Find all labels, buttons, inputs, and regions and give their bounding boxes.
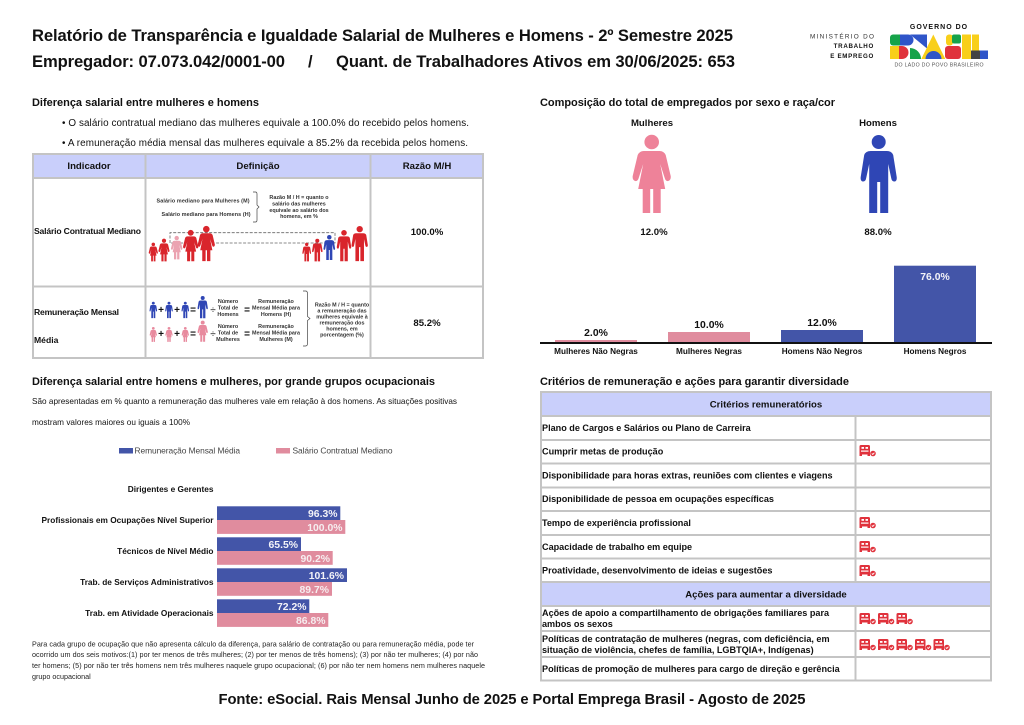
title: Quant. de Trabalhadores Ativos em 30/06/2025: 653 — [336, 52, 735, 71]
pictogram: mulheres: 12.0% — [640, 227, 668, 238]
logo: Ministério do Trabalho e Emprego — [810, 32, 874, 60]
diagram: salário mediano: Razão M / H = quanto o — [269, 195, 329, 201]
bar chart: sexo e raça/cor: Mulheres Negras — [676, 347, 742, 356]
bar chart: grupos ocupacionais: 65.5% — [269, 540, 298, 551]
table: critérios e ações: ambos os sexos — [542, 619, 613, 629]
table: critérios e ações: Políticas de promoção de mulheres para cargo de direção e gerência — [542, 664, 841, 674]
diagram: salário mediano: equivale ao salário dos — [269, 208, 329, 214]
bar chart: grupos ocupacionais: Técnicos de Nível Médio — [117, 546, 214, 556]
table: critérios e ações: Plano de Cargos e Salários ou Plano de Carreira — [542, 423, 752, 433]
text block: resumo: • O salário contratual mediano das mulheres equivale a 100.0% do recebido pelos homens. — [62, 118, 469, 129]
table: indicadores: Indicador — [67, 161, 111, 172]
title: Empregador: 07.073.042/0001-00 — [32, 52, 285, 71]
title: / — [308, 52, 313, 71]
legend: Salário Contratual Mediano — [292, 446, 393, 456]
logo: Governo do Brasil — [890, 24, 988, 68]
bar chart: grupos ocupacionais: Dirigentes e Gerentes — [128, 484, 214, 494]
diagram: remuneração média: Mulheres (M) — [259, 337, 293, 343]
bar chart: sexo e raça/cor: 10.0% — [694, 320, 724, 331]
diagram: remuneração média: + — [158, 329, 164, 340]
table: critérios e ações: Cumprir metas de produção — [542, 446, 664, 456]
pictogram: mulheres — [631, 118, 673, 238]
bar chart: sexo e raça/cor: Mulheres Não Negras — [554, 347, 638, 356]
logo: Governo do Brasil: GOVERNO DO — [910, 24, 968, 31]
table: critérios e ações: Disponibilidade para horas extras, reuniões com clientes e viagens — [542, 470, 833, 480]
diagram: remuneração média: + — [174, 305, 180, 316]
table: critérios e ações: Proatividade, desenvolvimento de ideias e sugestões — [542, 566, 772, 576]
text block: resumo — [62, 118, 469, 149]
footnote: grupo ocupacional — [32, 672, 91, 681]
footnote: Para cada grupo de ocupação que não apresenta cálculo da diferença, para salário de contratação ou para remuneração média, pode ter — [32, 640, 475, 648]
footnote: ocorrido um dos seis motivos:(1) por ter menos de três mulheres; (2) por ter menos de três homens); (3) por não ter mulheres; (4) por não — [32, 650, 478, 659]
diagram: salário mediano: Salário mediano para Mulheres (M) — [156, 198, 250, 204]
text block: explicação — [32, 397, 457, 427]
diagram: remuneração média: = — [244, 329, 250, 340]
bar chart: grupos ocupacionais: Trab. em Atividade Operacionais — [85, 608, 214, 618]
text block: explicação: São apresentadas em % quanto a remuneração das mulheres vale em relação à dos homens. As situações positivas — [32, 397, 457, 406]
bar chart: sexo e raça/cor: Homens Negros — [904, 347, 967, 356]
legend — [119, 446, 393, 456]
diagram: remuneração média: Total de — [218, 306, 238, 312]
diagram: remuneração média: Razão M / H = quanto — [315, 302, 370, 308]
bar chart: grupos ocupacionais: Profissionais em Ocupações Nível Superior — [42, 515, 214, 525]
text block: resumo: • A remuneração média mensal das mulheres equivale a 85.2% da recebida pelos homens. — [62, 138, 468, 149]
bar chart: grupos ocupacionais: 86.8% — [296, 616, 326, 627]
table: critérios e ações: situação de violência, chefes de família, LGBTQIA+, Indígenas) — [542, 645, 814, 655]
table: critérios e ações: Ações de apoio a compartilhamento de obrigações familiares para — [542, 608, 830, 618]
bar chart: sexo e raça/cor: 76.0% — [920, 272, 950, 283]
diagram: remuneração média: Número — [218, 299, 239, 305]
table: critérios e ações: Disponibilidade de pessoa em ocupações específicas — [542, 494, 774, 504]
heading: diferença salarial: Diferença salarial entre mulheres e homens — [32, 97, 259, 109]
diagram: salário mediano — [149, 192, 368, 261]
heading: grupos ocupacionais: Diferença salarial entre homens e mulheres, por grande grupos ocupacionais — [32, 376, 435, 388]
bar chart: sexo e raça/cor: Homens Não Negros — [782, 347, 863, 356]
diagram: remuneração média: a remuneração das — [317, 308, 367, 314]
icons: critérios presentes — [860, 445, 950, 650]
table: indicadores: Definição — [236, 161, 280, 172]
table: indicadores — [33, 154, 483, 358]
bar chart: grupos ocupacionais — [42, 484, 347, 627]
table: indicadores: Salário Contratual Mediano — [34, 226, 141, 236]
pictogram: homens: 88.0% — [864, 227, 892, 238]
title — [32, 26, 735, 71]
diagram: salário mediano: homens, em % — [280, 214, 318, 220]
diagram: remuneração média: = — [190, 329, 196, 340]
title: Relatório de Transparência e Igualdade Salarial de Mulheres e Homens - 2º Semestre 2025 — [32, 26, 733, 45]
diagram: remuneração média: ÷ — [210, 329, 216, 340]
logo: Ministério do Trabalho e Emprego: MINISTÉRIO DO — [810, 32, 874, 40]
bar chart: sexo e raça/cor: 2.0% — [584, 328, 608, 339]
table: critérios e ações: Tempo de experiência profissional — [542, 518, 691, 528]
bar chart: grupos ocupacionais: Trab. de Serviços Administrativos — [80, 577, 214, 587]
bar chart: grupos ocupacionais: 96.3% — [308, 509, 338, 520]
table: critérios e ações: Políticas de contratação de mulheres (negras, com deficiência, em — [542, 634, 830, 644]
logo: Ministério do Trabalho e Emprego: TRABALHO — [834, 43, 874, 50]
pictogram: homens — [859, 118, 897, 238]
source: Fonte: eSocial. Rais Mensal Junho de 2025 e Portal Emprega Brasil - Agosto de 2025 — [218, 692, 806, 708]
diagram: salário mediano: Salário mediano para Homens (H) — [162, 212, 251, 218]
footnote: ter homens; (5) por não ter três homens nem três mulheres naquele grupo ocupacional; (6) por não ter nem homens nem mulheres naquele — [32, 661, 485, 670]
diagram: remuneração média: + — [174, 329, 180, 340]
logo: Governo do Brasil: DO LADO DO POVO BRASILEIRO — [894, 62, 984, 68]
diagram: remuneração média — [150, 291, 370, 346]
bar chart: sexo e raça/cor — [540, 266, 992, 356]
table: indicadores: 100.0% — [411, 227, 444, 238]
diagram: remuneração média: Homens (H) — [261, 312, 291, 318]
bar chart: grupos ocupacionais: 100.0% — [307, 523, 342, 534]
text block: explicação: mostram valores maiores ou iguais a 100% — [32, 418, 190, 427]
diagram: remuneração média: ÷ — [210, 305, 216, 316]
legend: Remuneração Mensal Média — [134, 446, 240, 456]
diagram: remuneração média: Remuneração — [258, 299, 295, 305]
bar chart: sexo e raça/cor: 12.0% — [807, 318, 837, 329]
diagram: remuneração média: Mensal Média para — [252, 330, 301, 336]
diagram: remuneração média: + — [158, 305, 164, 316]
bar chart: grupos ocupacionais: 72.2% — [277, 602, 306, 613]
diagram: remuneração média: Mensal Média para — [252, 306, 301, 312]
table: critérios e ações: Critérios remuneratórios — [710, 400, 822, 410]
heading: critérios: Critérios de remuneração e ações para garantir diversidade — [540, 376, 849, 388]
diagram: remuneração média: Homens — [217, 312, 239, 318]
heading: composição: Composição do total de empregados por sexo e raça/cor — [540, 97, 836, 109]
table: critérios e ações: Capacidade de trabalho em equipe — [542, 542, 692, 552]
diagram: remuneração média: homens, em — [326, 326, 358, 332]
table: critérios e ações — [541, 392, 991, 680]
diagram: remuneração média: = — [244, 305, 250, 316]
table: indicadores: Média — [34, 335, 59, 345]
footnote — [32, 640, 485, 681]
diagram: remuneração média: Número — [218, 324, 239, 330]
table: critérios e ações: Ações para aumentar a diversidade — [685, 590, 847, 600]
bar chart: grupos ocupacionais: 90.2% — [301, 554, 330, 565]
diagram: remuneração média: porcentagem (%) — [320, 332, 364, 338]
table: indicadores: Remuneração Mensal — [34, 307, 119, 317]
bar chart: grupos ocupacionais: 101.6% — [309, 571, 344, 582]
logo: Ministério do Trabalho e Emprego: E EMPREGO — [830, 53, 874, 60]
diagram: remuneração média: = — [190, 305, 196, 316]
diagram: remuneração média: Remuneração — [258, 324, 295, 330]
table: indicadores: Razão M/H — [403, 161, 451, 172]
table: indicadores: 85.2% — [413, 318, 441, 329]
bar chart: grupos ocupacionais: 89.7% — [300, 585, 329, 596]
pictogram: mulheres: Mulheres — [631, 118, 673, 129]
pictogram: homens: Homens — [859, 118, 897, 129]
diagram: remuneração média: Total de — [218, 330, 238, 336]
diagram: salário mediano: salário das mulheres — [272, 202, 326, 208]
diagram: remuneração média: mulheres equivale à — [316, 314, 369, 320]
diagram: remuneração média: remuneração dos — [320, 320, 364, 326]
diagram: remuneração média: Mulheres — [216, 337, 240, 343]
